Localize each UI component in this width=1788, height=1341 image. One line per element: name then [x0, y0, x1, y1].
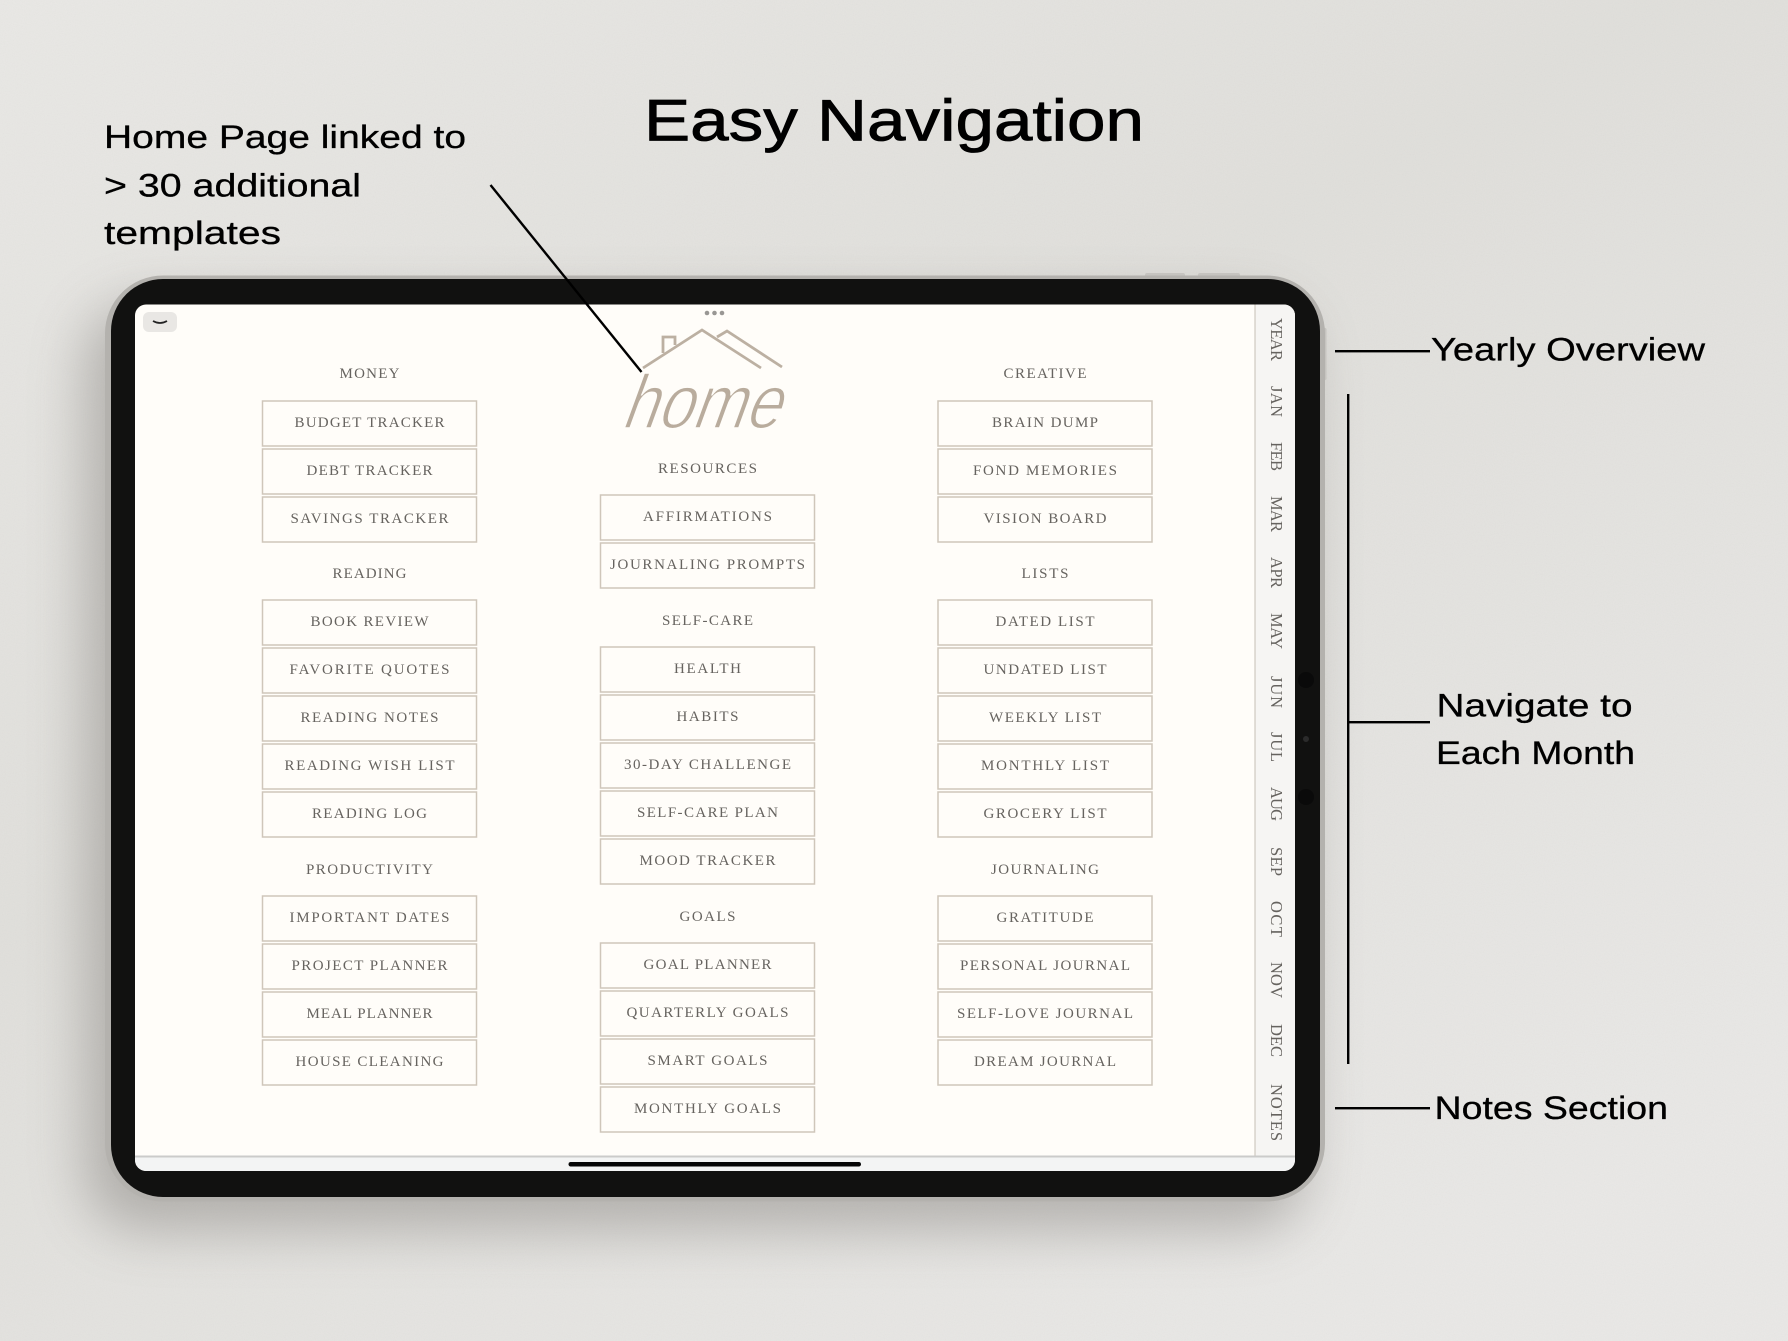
button: journaling prompts [600, 543, 814, 588]
button: reading notes [262, 696, 476, 741]
button: gratitude: GRATITUDE [996, 910, 1094, 926]
callout text: notes section: Notes Section [1434, 1090, 1668, 1126]
button: monthly list [938, 744, 1152, 789]
button: quarterly goals: QUARTERLY GOALS [626, 1005, 788, 1021]
button: grocery list [938, 792, 1152, 837]
column: creative, lists, journaling [938, 366, 1152, 1085]
callout text: home page: templates [104, 215, 281, 251]
button: debt tracker [262, 449, 476, 494]
heading: self-care: SELF-CARE [662, 613, 753, 629]
button: weekly list: WEEKLY LIST [989, 710, 1101, 726]
logo word: home [614, 359, 803, 444]
button: savings tracker: SAVINGS TRACKER [290, 511, 448, 527]
device side buttons [1145, 273, 1326, 380]
button: undated list [938, 648, 1152, 693]
heading: creative: CREATIVE [1004, 366, 1086, 382]
button: gratitude [938, 896, 1152, 941]
button: reading notes: READING NOTES [300, 710, 438, 726]
sidebar tabs: YEAR [1267, 318, 1286, 361]
button: self-love journal: SELF-LOVE JOURNAL [957, 1006, 1133, 1022]
button: fond memories [938, 449, 1152, 494]
button: meal planner [262, 992, 476, 1037]
button: debt tracker: DEBT TRACKER [306, 463, 432, 479]
button: budget tracker [262, 401, 476, 446]
button: self-care plan [600, 791, 814, 836]
title: Easy Navigation [644, 89, 1144, 154]
callout text: navigate to each month [1436, 688, 1635, 771]
button: quarterly goals [600, 991, 814, 1036]
sidebar tabs: NOV [1267, 962, 1286, 998]
button: monthly goals: MONTHLY GOALS [634, 1101, 781, 1117]
button: habits: HABITS [676, 709, 738, 725]
device: tablet [85, 273, 1326, 1230]
sidebar tabs: OCT [1267, 901, 1286, 937]
bracket: months line [1347, 394, 1430, 1064]
button: favorite quotes: FAVORITE QUOTES [290, 662, 450, 678]
heading: resources: RESOURCES [658, 461, 757, 477]
arrow: home page pointer [490, 185, 642, 372]
heading: reading: READING [332, 566, 407, 582]
device frame [105, 276, 1325, 1202]
button: dated list [938, 600, 1152, 645]
sidebar tabs: AUG [1267, 787, 1286, 821]
arrow: notes section line [1335, 1107, 1430, 1109]
home indicator [568, 1162, 861, 1166]
button: 30-day challenge [600, 743, 814, 788]
button: undated list: UNDATED LIST [984, 662, 1106, 678]
sidebar tabs: NOTES [1267, 1084, 1286, 1141]
button: project planner [262, 944, 476, 989]
button: health: HEALTH [674, 661, 741, 677]
callout text: navigate to each month: Navigate to [1436, 688, 1632, 724]
button: 30-day challenge: 30-DAY CHALLENGE [624, 757, 791, 773]
sidebar tabs: JUL [1267, 732, 1286, 762]
callout text: navigate to each month: Each Month [1436, 735, 1635, 771]
button: journaling prompts: JOURNALING PROMPTS [610, 557, 805, 573]
button: self-care plan: SELF-CARE PLAN [637, 805, 778, 821]
multitasking dots [705, 311, 724, 315]
button: vision board: VISION BOARD [984, 511, 1107, 527]
camera dots [1298, 672, 1314, 805]
bottom bar [135, 1156, 1295, 1171]
sidebar tabs: FEB [1267, 442, 1286, 471]
sidebar toggle button [143, 312, 177, 332]
button: mood tracker [600, 839, 814, 884]
button: project planner: PROJECT PLANNER [292, 958, 448, 974]
button: meal planner: MEAL PLANNER [306, 1006, 432, 1022]
button: dream journal: DREAM JOURNAL [974, 1054, 1116, 1070]
button: monthly list: MONTHLY LIST [981, 758, 1109, 774]
button: health [600, 647, 814, 692]
device shadow [85, 305, 1305, 1230]
sidebar tabs: DEC [1267, 1024, 1286, 1057]
column: money, reading, productivity [262, 366, 476, 1085]
home logo [614, 330, 803, 444]
button: weekly list [938, 696, 1152, 741]
button: reading log [262, 792, 476, 837]
button: house cleaning: HOUSE CLEANING [296, 1054, 444, 1070]
heading: productivity: PRODUCTIVITY [306, 862, 433, 878]
callout text: yearly overview: Yearly Overview [1431, 332, 1706, 368]
device bezel [111, 279, 1320, 1197]
button: book review [262, 600, 476, 645]
button: reading log: READING LOG [312, 806, 427, 822]
callout text: home page: Home Page linked to [104, 119, 466, 155]
button: dated list: DATED LIST [996, 614, 1094, 630]
arrow: yearly overview line [1335, 350, 1430, 352]
screen [135, 304, 1295, 1171]
column: resources, self-care, goals [600, 461, 814, 1132]
sidebar tabs: JAN [1267, 386, 1286, 417]
button: reading wish list: READING WISH LIST [284, 758, 454, 774]
callout text: home page: > 30 additional [104, 168, 361, 204]
icon: house [643, 330, 782, 368]
button: grocery list: GROCERY LIST [984, 806, 1106, 822]
heading: lists: LISTS [1022, 566, 1068, 582]
callout text: home page [104, 119, 466, 251]
button: vision board [938, 497, 1152, 542]
button: important dates [262, 896, 476, 941]
button: dream journal [938, 1040, 1152, 1085]
button: smart goals [600, 1039, 814, 1084]
button: brain dump: BRAIN DUMP [992, 415, 1098, 431]
sidebar tabs: MAR [1267, 496, 1286, 532]
button: goal planner: GOAL PLANNER [644, 957, 772, 973]
button: personal journal [938, 944, 1152, 989]
button: monthly goals [600, 1087, 814, 1132]
sidebar tabs: APR [1267, 557, 1286, 588]
heading: money: MONEY [340, 366, 400, 382]
button: affirmations [600, 495, 814, 540]
sidebar tabs [1254, 304, 1295, 1156]
button: personal journal: PERSONAL JOURNAL [960, 958, 1130, 974]
button: brain dump [938, 401, 1152, 446]
button: house cleaning [262, 1040, 476, 1085]
button: smart goals: SMART GOALS [648, 1053, 768, 1069]
sidebar tabs: MAY [1267, 613, 1286, 649]
sidebar tabs: SEP [1267, 847, 1286, 876]
button: fond memories: FOND MEMORIES [973, 463, 1117, 479]
button: goal planner [600, 943, 814, 988]
button: affirmations: AFFIRMATIONS [643, 509, 772, 525]
sidebar tabs: JUN [1267, 676, 1286, 708]
button: reading wish list [262, 744, 476, 789]
heading: goals: GOALS [680, 909, 736, 925]
button: budget tracker: BUDGET TRACKER [294, 415, 444, 431]
button: habits [600, 695, 814, 740]
button: book review: BOOK REVIEW [310, 614, 429, 630]
button: savings tracker [262, 497, 476, 542]
button: favorite quotes [262, 648, 476, 693]
button: mood tracker: MOOD TRACKER [640, 853, 776, 869]
button: important dates: IMPORTANT DATES [290, 910, 450, 926]
heading: journaling: JOURNALING [991, 862, 1099, 878]
button: self-love journal [938, 992, 1152, 1037]
